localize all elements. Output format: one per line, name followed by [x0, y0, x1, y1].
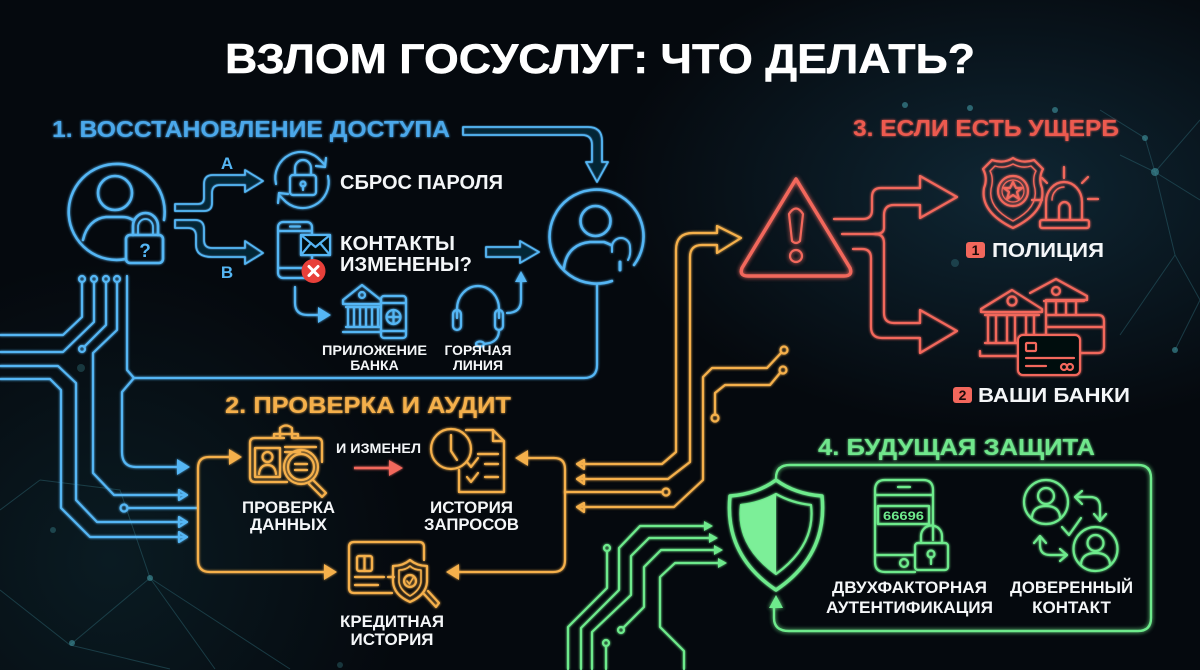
text: bank app: ПРИЛОЖЕНИЕ [322, 342, 427, 358]
icon: bank app [343, 285, 406, 338]
text: trusted contact: ДОВЕРЕННЫЙ [1010, 578, 1133, 597]
text: credit history [340, 612, 444, 649]
text: trusted contact [1010, 578, 1133, 617]
arrow: to banks [853, 234, 957, 353]
text: hotline: ЛИНИЯ [453, 357, 503, 373]
icon: request history [431, 429, 504, 492]
panel: 3. if there is damage [741, 115, 1130, 407]
circuit: orange traces [565, 226, 788, 512]
icon: phone 2FA [875, 480, 948, 572]
frame with return arrow [769, 465, 1151, 631]
icon: restored user [550, 190, 644, 284]
label: your banks: 2 [959, 387, 967, 403]
text: two-factor authentication [826, 578, 993, 617]
label: your banks: ВАШИ БАНКИ [978, 385, 1130, 407]
arrow: option B [175, 220, 263, 264]
text: credit history: КРЕДИТНАЯ [340, 612, 444, 631]
panel: 1. access recovery [0, 116, 644, 542]
text: credit history: ИСТОРИЯ [350, 630, 434, 649]
arrowhead: to audit [177, 459, 190, 475]
text: data check [242, 498, 335, 534]
text: request history [424, 498, 519, 534]
arrowheads: green traces [704, 521, 727, 568]
text: hotline [444, 342, 512, 373]
text: data check: ДАННЫХ [250, 515, 328, 534]
text: request history: ЗАПРОСОВ [424, 515, 519, 534]
icon: data check [250, 426, 326, 497]
heading: section 4: 4. БУДУЩАЯ ЗАЩИТА [818, 434, 1095, 460]
arrow: contacts to restored user [486, 241, 539, 263]
heading: section 1: 1. ВОССТАНОВЛЕНИЕ ДОСТУПА [52, 116, 450, 142]
arrow: to police [834, 176, 957, 234]
line: flow from restored user to audit [122, 276, 597, 467]
label: B: В [221, 263, 233, 282]
heading: section 2: 2. ПРОВЕРКА И АУДИТ [225, 392, 511, 418]
icon: police badge and siren [983, 158, 1098, 228]
text: code: 66696 [883, 511, 924, 523]
title: ВЗЛОМ ГОСУСЛУГ: ЧТО ДЕЛАТЬ? [225, 35, 975, 82]
icon: shield [729, 480, 823, 590]
text: and changed: И ИЗМЕНЕЛ [336, 440, 421, 456]
text: contacts changed [340, 233, 472, 276]
arrow: red [354, 460, 403, 476]
text: password reset: СБРОС ПАРОЛЯ [340, 172, 503, 194]
text: request history: ИСТОРИЯ [430, 498, 513, 517]
label: police: 1 [972, 242, 980, 258]
text: two-factor authentication: АУТЕНТИФИКАЦИЯ [826, 598, 993, 617]
text: contacts changed: ИЗМЕНЕНЫ? [340, 254, 472, 276]
icon: phone with mail and error [278, 222, 330, 283]
icon label: question mark: ? [139, 241, 151, 262]
icon: trusted contact [1024, 480, 1118, 571]
text: two-factor authentication: ДВУХФАКТОРНАЯ [832, 578, 987, 597]
label: police: ПОЛИЦИЯ [992, 240, 1104, 262]
loop: right arrows [446, 450, 565, 580]
panel: 4. future protection [568, 434, 1151, 669]
panel: 2. check and audit [198, 226, 788, 649]
arrow: hotline up [507, 271, 527, 313]
text: data check: ПРОВЕРКА [242, 498, 335, 517]
circuit: blue traces [0, 276, 197, 542]
label: A: А [221, 154, 233, 173]
icon: locked user [69, 164, 165, 263]
arrow: heading to restored user [463, 127, 608, 182]
icon: password reset lock [275, 152, 329, 208]
text: hotline: ГОРЯЧАЯ [444, 342, 512, 358]
text: contacts changed: КОНТАКТЫ [340, 233, 455, 255]
text: bank app: БАНКА [350, 357, 399, 373]
icon: banks and cards [980, 279, 1104, 375]
text: trusted contact: КОНТАКТ [1032, 598, 1111, 617]
heading: section 3: 3. ЕСЛИ ЕСТЬ УЩЕРБ [853, 115, 1119, 141]
arrow: option A [175, 170, 263, 211]
icon: warning triangle [741, 179, 851, 276]
circuit: green traces [568, 526, 720, 669]
icon: headset [453, 286, 503, 346]
icon: credit history [349, 542, 439, 607]
arrow: to bank app [295, 287, 331, 323]
loop: left arrows [198, 449, 337, 580]
text: bank app [322, 342, 427, 373]
